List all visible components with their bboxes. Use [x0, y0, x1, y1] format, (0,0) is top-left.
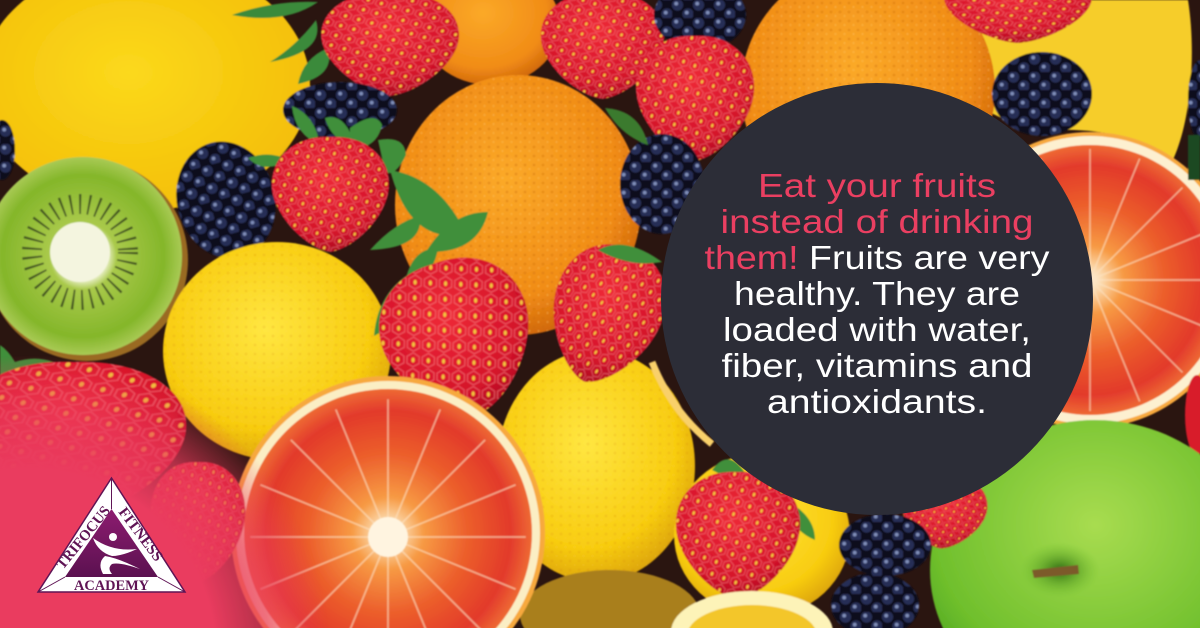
lemon bottom right [674, 453, 850, 617]
callout text: them! Fruits are very [704, 239, 1050, 276]
leaves on bottom strawberry [712, 459, 815, 540]
callout text: Eat your fruits [758, 167, 996, 204]
large orange top right [741, 0, 995, 217]
lemon slice bottom [671, 591, 833, 628]
logo figure [93, 533, 140, 574]
red strawberry right edge [1185, 375, 1200, 455]
callout text [704, 167, 1050, 420]
pink gradient corner [0, 340, 340, 628]
strawberry right of centre [532, 231, 680, 399]
strawberry with leaves [248, 106, 466, 252]
blood orange slice centre [231, 376, 545, 628]
strawberry bottom left [0, 345, 186, 517]
logo text TRIFOCUS: TRIFOCUS [54, 503, 114, 573]
blackberry centre right [620, 134, 704, 234]
orange centre [395, 75, 641, 335]
logo white triangle [38, 478, 185, 592]
blackberry left [163, 130, 289, 270]
dark green sliver right edge [1188, 135, 1200, 180]
lemon lower centre [497, 350, 695, 582]
green apple [930, 420, 1200, 628]
blackberry top centre [654, 0, 746, 50]
blackberry bottom lower [831, 573, 919, 628]
strawberry below circle [897, 470, 990, 552]
logo purple triangle [65, 509, 158, 577]
logo divider lines [38, 478, 185, 592]
blackberry top right [992, 52, 1092, 136]
dark text circle [661, 83, 1093, 515]
blackberry bottom upper [839, 514, 931, 576]
leaves top left strawberry [232, 2, 329, 84]
callout text: fiber, vitamins and [722, 347, 1032, 384]
strawberry top right [944, 0, 1092, 43]
blackberry left edge [0, 120, 15, 180]
callout text: healthy. They are [734, 275, 1020, 312]
yellow melon top left [0, 0, 310, 210]
logo text ACADEMY: ACADEMY [74, 578, 149, 594]
leaf on strawberry [598, 245, 662, 264]
strawberry top left-centre [321, 0, 459, 96]
orange top centre [420, 0, 560, 85]
banana top right [975, 0, 1192, 162]
strawberry bottom [676, 472, 800, 599]
strawberry top centre [541, 0, 664, 99]
strawberry lower left [151, 462, 245, 582]
blackberry upper left [283, 82, 397, 138]
citrus rim beside circle [652, 362, 712, 444]
logo: Trifocus Fitness Academy [38, 478, 185, 594]
blood orange slice right [942, 132, 1200, 428]
logo text FITNESS: FITNESS [115, 505, 165, 565]
pear bottom [520, 570, 700, 628]
large lemon left [163, 242, 391, 460]
strawberry centre [363, 212, 553, 435]
callout text: loaded with water, [723, 311, 1031, 348]
callout text: instead of drinking [720, 203, 1034, 240]
callout text: antioxidants. [767, 383, 987, 420]
blackberry far right [1188, 60, 1200, 140]
leaf on blackberry [605, 108, 648, 145]
strawberry upper centre [636, 36, 754, 161]
kiwi half [0, 157, 188, 361]
